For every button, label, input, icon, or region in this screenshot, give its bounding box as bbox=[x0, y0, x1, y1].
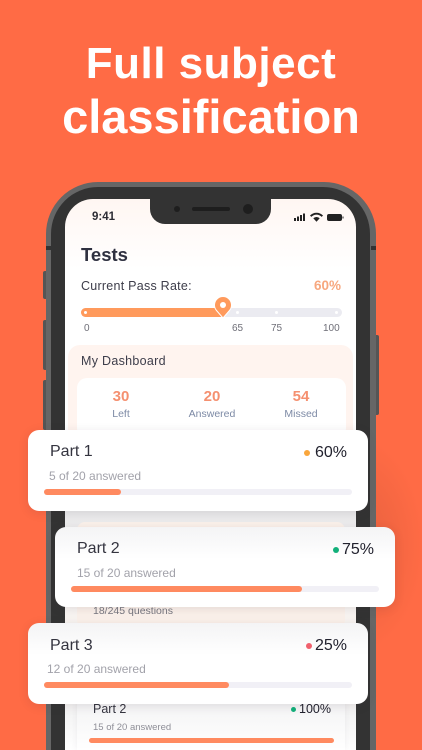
background card title: Part 2 bbox=[93, 702, 126, 716]
side button: power bbox=[376, 335, 379, 415]
screen bbox=[65, 199, 356, 750]
status time: 9:41 bbox=[92, 211, 115, 223]
dashboard heading: My Dashboard bbox=[81, 354, 166, 368]
antenna band right bbox=[371, 246, 376, 250]
antenna band left bbox=[46, 246, 51, 250]
stat label: Left bbox=[112, 408, 130, 420]
slider label 100: 100 bbox=[323, 323, 340, 334]
part 1 title: Part 1 bbox=[50, 443, 93, 460]
part 3 percent: 25% bbox=[315, 637, 347, 654]
title bbox=[62, 39, 360, 143]
slider tick 65 bbox=[236, 311, 239, 314]
slider tick 0 bbox=[84, 311, 87, 314]
pass rate slider bbox=[81, 308, 342, 317]
side button: mute bbox=[43, 271, 46, 299]
background card status dot bbox=[291, 707, 296, 712]
background card subtitle: 15 of 20 answered bbox=[93, 722, 171, 733]
part 2 progress bbox=[71, 586, 379, 592]
notch camera bbox=[243, 204, 253, 214]
panel: dashboard stats bbox=[77, 378, 346, 438]
stat value: 20 bbox=[204, 388, 220, 405]
pass rate value: 60% bbox=[314, 278, 341, 293]
stat: missed bbox=[284, 388, 318, 420]
phone bezel bbox=[51, 187, 370, 750]
part 2 title: Part 2 bbox=[77, 540, 120, 557]
phone bbox=[46, 182, 376, 750]
stat value: 54 bbox=[293, 388, 309, 405]
shaded screen behind cards bbox=[65, 510, 356, 750]
side button: volume down bbox=[43, 380, 46, 430]
notch sensor bbox=[174, 206, 180, 212]
part 2 status dot bbox=[333, 547, 339, 553]
slider fill bbox=[81, 308, 226, 317]
card: part 2 bbox=[55, 527, 395, 607]
part 2 answered: 15 of 20 answered bbox=[77, 566, 176, 580]
stat label: Missed bbox=[284, 408, 318, 420]
icon: slider pin bbox=[214, 297, 232, 318]
background card text: 18/245 questions bbox=[93, 605, 173, 617]
part 1 progress bbox=[44, 489, 352, 495]
notch bbox=[150, 199, 271, 224]
pass rate label: Current Pass Rate: bbox=[81, 279, 192, 293]
slider label 0: 0 bbox=[84, 323, 90, 334]
background glow bbox=[340, 440, 422, 650]
part 3 answered: 12 of 20 answered bbox=[47, 662, 146, 676]
slider tick 100 bbox=[335, 311, 338, 314]
part 3 status dot bbox=[306, 643, 312, 649]
part 2 percent: 75% bbox=[342, 541, 374, 558]
slider label 75: 75 bbox=[271, 323, 282, 334]
panel: my dashboard bbox=[68, 345, 353, 750]
status icons bbox=[294, 212, 344, 222]
panel: background part 2 card bbox=[77, 690, 345, 750]
heading: Tests: Tests bbox=[81, 244, 128, 265]
slider tick 75 bbox=[275, 311, 278, 314]
panel: background question card bbox=[77, 522, 345, 628]
card: part 1 bbox=[28, 430, 368, 511]
stat: left bbox=[112, 388, 130, 420]
slider label 65: 65 bbox=[232, 323, 243, 334]
part 1 answered: 5 of 20 answered bbox=[49, 469, 141, 483]
stat label: Answered bbox=[189, 408, 235, 420]
title line 2: classification bbox=[62, 90, 360, 143]
background card percent: 100% bbox=[299, 702, 331, 716]
stat: answered bbox=[188, 388, 235, 420]
card: part 3 bbox=[28, 623, 368, 704]
part 3 progress bbox=[44, 682, 352, 688]
notch speaker bbox=[192, 207, 230, 211]
background card progress bbox=[89, 738, 334, 743]
part 1 percent: 60% bbox=[315, 444, 347, 461]
part 3 title: Part 3 bbox=[50, 637, 93, 654]
side button: volume up bbox=[43, 320, 46, 370]
stat value: 30 bbox=[113, 388, 129, 405]
title line 1: Full subject bbox=[86, 39, 336, 88]
part 1 status dot bbox=[304, 450, 310, 456]
